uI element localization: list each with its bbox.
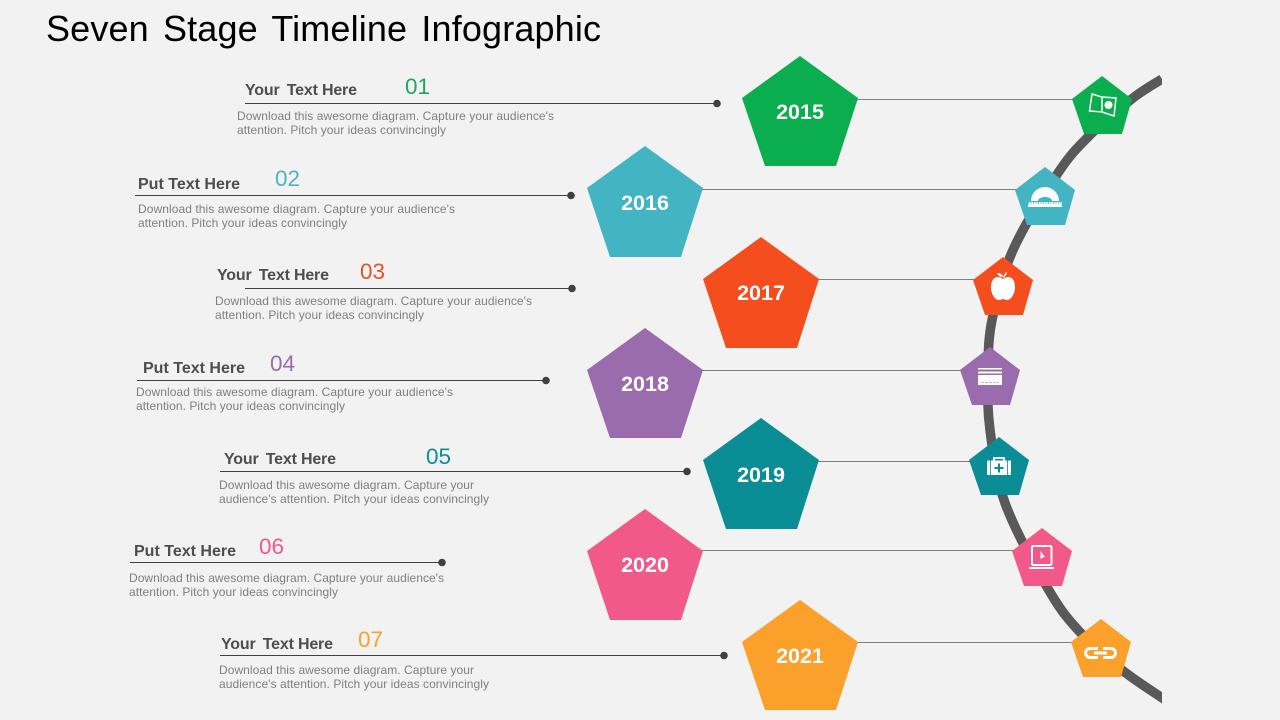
stage 7 description: audience's attention. Pitch your ideas convincingly: [219, 677, 489, 691]
stage 6 connector: [701, 550, 1013, 552]
stage 4: [136, 328, 1020, 438]
stage 6 heading: Put Text Here: [134, 543, 236, 560]
stage 3 heading: Your Text Here: [217, 267, 329, 284]
stage 3 leader line: [245, 285, 576, 292]
stage 4 year: 2018: [621, 372, 669, 396]
stage 6 leader line: [130, 559, 446, 566]
stage 6 description: Download this awesome diagram. Capture your audience's: [129, 571, 444, 585]
stage 6 icon badge: [1012, 528, 1072, 586]
stage 3 year pentagon: [703, 237, 819, 348]
stage 3 number: 03: [360, 259, 385, 284]
icon: chain link: [1086, 648, 1116, 658]
stage 1 heading: Your Text Here: [245, 82, 357, 99]
stage 4 description: attention. Pitch your ideas convincingly: [136, 399, 345, 413]
stage 4 icon badge: [960, 347, 1020, 405]
stage 2 icon badge: [1015, 167, 1075, 225]
stage 5 number: 05: [426, 444, 451, 469]
stage 7 leader line: [220, 652, 728, 659]
stage 3 year: 2017: [737, 281, 785, 305]
stage 1 description: attention. Pitch your ideas convincingly: [237, 123, 446, 137]
stage 1 connector: [856, 98, 1074, 100]
stage 6 number: 06: [259, 534, 284, 559]
stage 6 year: 2020: [621, 553, 669, 577]
stage 7 heading: Your Text Here: [221, 636, 333, 653]
stage 2 description: Download this awesome diagram. Capture your audience's: [138, 202, 455, 216]
icon: open book: [1090, 94, 1116, 116]
stage 3 connector: [817, 278, 975, 280]
stage 5 description: audience's attention. Pitch your ideas convincingly: [219, 492, 489, 506]
stage 3 description: Download this awesome diagram. Capture your audience's: [215, 294, 532, 308]
icon: protractor and ruler: [1028, 187, 1062, 207]
stage 4 leader line: [137, 377, 550, 384]
stage 4 description: Download this awesome diagram. Capture your audience's: [136, 385, 453, 399]
stage 2 number: 02: [275, 166, 300, 191]
stage 5 leader line: [220, 468, 691, 475]
stage 7: [219, 600, 1131, 710]
stage 7 icon badge: [1071, 619, 1131, 677]
stage 2 description: attention. Pitch your ideas convincingly: [138, 216, 347, 230]
stage 4 year pentagon: [587, 328, 703, 438]
stage 2 description: [138, 202, 455, 230]
stage 7 description: Download this awesome diagram. Capture your: [219, 663, 474, 677]
stage 5: [219, 418, 1029, 529]
stage 1 number: 01: [405, 74, 430, 99]
stage 4 heading: Put Text Here: [143, 360, 245, 377]
stage 7 connector: [856, 642, 1073, 644]
stage 2 connector: [701, 188, 1017, 190]
stage 1 year: 2015: [776, 100, 824, 124]
stage 2 leader line: [135, 192, 575, 199]
stage 3 icon badge: [973, 257, 1033, 315]
icon: medical kit: [987, 458, 1011, 475]
stage 4 connector: [701, 370, 962, 372]
stage 5 icon badge: [969, 437, 1029, 495]
stage 5 year pentagon: [703, 418, 819, 529]
stage 2 year pentagon: [587, 146, 703, 257]
stage 7 number: 07: [358, 627, 383, 652]
stage 1 description: Download this awesome diagram. Capture your audience's: [237, 109, 554, 123]
stage 1 year pentagon: [742, 56, 858, 166]
stage 5 year: 2019: [737, 463, 785, 487]
stage 3: [215, 237, 1033, 348]
stage 6 year pentagon: [587, 509, 703, 620]
stage 4 number: 04: [270, 351, 295, 376]
title: Seven Stage Timeline Infographic: [46, 8, 601, 49]
stage 6: [129, 509, 1072, 620]
icon: credit card: [978, 368, 1002, 385]
stage 1 icon badge: [1072, 76, 1132, 134]
curve end mask: [1162, 60, 1192, 720]
stage 7 year pentagon: [742, 600, 858, 710]
stage 6 description: [129, 571, 444, 599]
icon: laptop with cursor: [1029, 546, 1054, 568]
stage 5 description: Download this awesome diagram. Capture your: [219, 478, 474, 492]
stage 1 description: [237, 109, 554, 137]
stage 5 description: [219, 478, 489, 506]
stage 6 description: attention. Pitch your ideas convincingly: [129, 585, 338, 599]
stage 2: [135, 146, 1075, 257]
curved timeline path: [988, 79, 1170, 703]
stage 3 description: attention. Pitch your ideas convincingly: [215, 308, 424, 322]
stage 5 heading: Your Text Here: [224, 451, 336, 468]
stage 2 heading: Put Text Here: [138, 176, 240, 193]
stage 7 description: [219, 663, 489, 691]
icon: apple: [991, 272, 1015, 300]
stage 1: [237, 56, 1132, 166]
stage 4 description: [136, 385, 453, 413]
stage 7 year: 2021: [776, 644, 824, 668]
stage 1 leader line: [245, 100, 721, 107]
stage 3 description: [215, 294, 532, 322]
stage 5 connector: [817, 460, 971, 462]
stage 2 year: 2016: [621, 191, 669, 215]
